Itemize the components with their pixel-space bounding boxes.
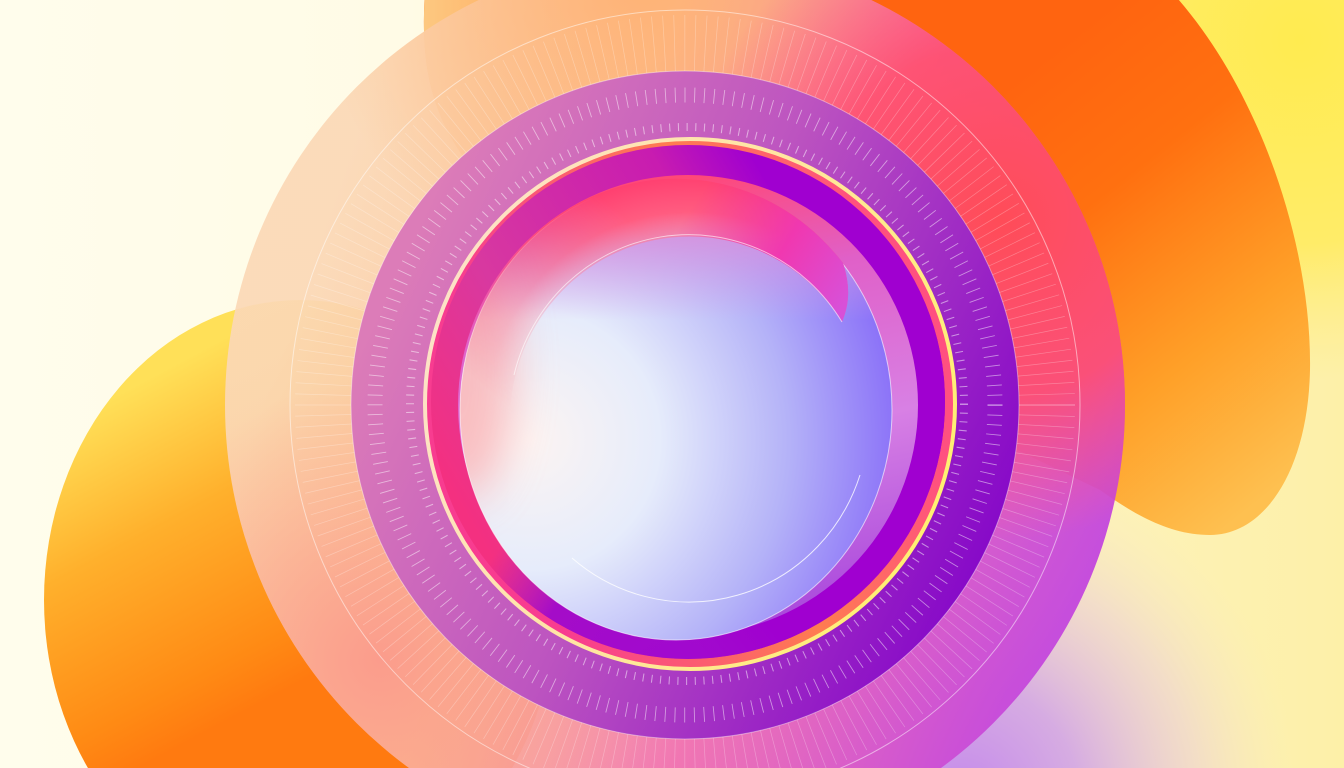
orange blob: top right <box>424 0 1310 535</box>
purple tick ring <box>351 71 1019 739</box>
yellow-orange blob: bottom left <box>44 300 556 768</box>
thin white arcs in disc <box>514 235 860 602</box>
magenta ring <box>431 145 945 659</box>
yellow highlight ring <box>425 139 955 669</box>
thin outer ring with radial ticks <box>290 10 1080 768</box>
lilac inner crescent <box>458 175 918 635</box>
pink crescent swoosh <box>466 180 848 376</box>
central luminous disc <box>460 202 892 640</box>
large outer circle <box>225 0 1125 768</box>
